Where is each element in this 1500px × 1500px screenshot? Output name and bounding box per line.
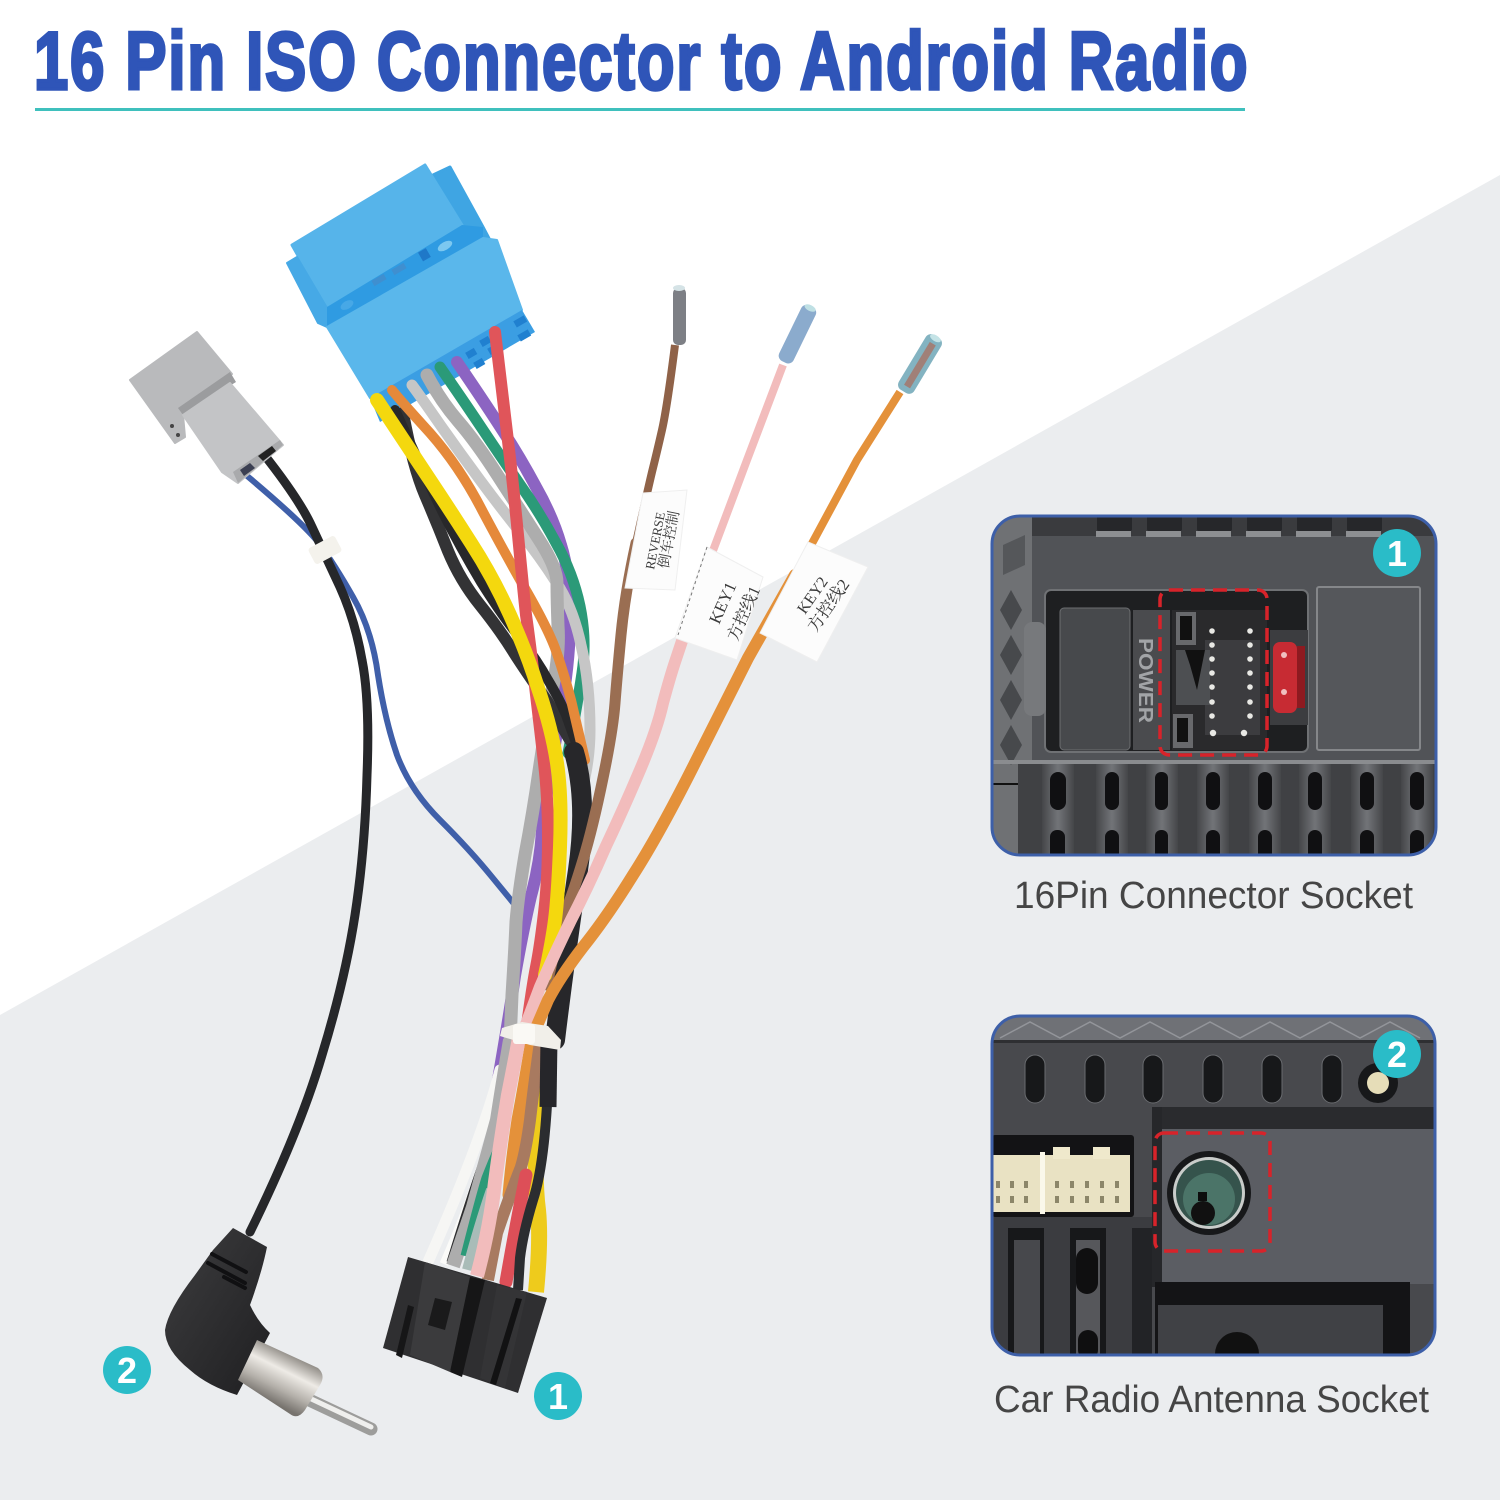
left hex pattern strip xyxy=(992,516,1032,855)
number badge 1: 1 xyxy=(1387,533,1407,574)
wire label: key1: 方控线1 xyxy=(723,583,764,644)
lower black xyxy=(518,1105,547,1290)
lower red xyxy=(506,1175,526,1282)
wire label: key2: KEY2 xyxy=(794,574,832,617)
lower recess xyxy=(1155,1282,1410,1354)
socket recess xyxy=(1045,590,1308,752)
plug metal barrel xyxy=(238,1340,323,1416)
wire: black trunk xyxy=(555,752,582,1040)
lower brown xyxy=(488,1042,540,1280)
white harness connector xyxy=(994,1135,1134,1217)
number badge 1 xyxy=(1373,529,1421,577)
small round socket xyxy=(1358,1063,1398,1103)
wire: orange key2 xyxy=(533,392,900,1035)
panel 2 frame xyxy=(992,1016,1435,1355)
antenna socket hole xyxy=(1167,1151,1251,1235)
wire label: reverse: 倒车控制 xyxy=(655,510,683,570)
caption: 16pin connector socket: 16Pin Connector Socket xyxy=(1014,875,1413,917)
antenna plug xyxy=(165,1228,371,1429)
sleeve tip: key2 wire xyxy=(896,331,945,396)
black sleeve xyxy=(548,1038,549,1107)
lower orange xyxy=(509,1040,532,1195)
lower grey xyxy=(453,1040,510,1266)
wire: purple xyxy=(457,362,570,1097)
wire: brown reverse xyxy=(547,345,675,985)
left blank block xyxy=(1060,608,1130,750)
wire label: reverse: REVERSE xyxy=(642,511,668,571)
lower yellow xyxy=(536,1045,544,1292)
title underline xyxy=(35,108,1245,111)
number badge 2: 2 xyxy=(1387,1034,1407,1075)
sleeve tip: reverse wire xyxy=(673,285,686,345)
antenna cable blue wire xyxy=(240,470,515,905)
lower wire bundle xyxy=(428,1038,549,1292)
wire: grey xyxy=(427,375,558,1043)
caption: car radio antenna socket: Car Radio Antenna Socket xyxy=(994,1379,1429,1421)
fuse xyxy=(1270,630,1308,725)
number badge 2: 2 xyxy=(117,1350,137,1391)
side bulge xyxy=(1032,622,1044,716)
number badge 1: 1 xyxy=(548,1376,568,1417)
wire: black 2 xyxy=(395,410,575,740)
zip tie: bundle xyxy=(500,1022,561,1050)
wire: pink key1 xyxy=(522,365,783,1035)
wire label: key1: KEY1 xyxy=(705,579,740,627)
wire: yellow xyxy=(377,400,561,975)
title: 16 Pin ISO Connector to Android Radio xyxy=(34,15,1248,107)
zip tie: antenna cable xyxy=(308,535,342,565)
wire: orange 1 xyxy=(392,390,585,760)
plug boot xyxy=(165,1228,270,1395)
wire: green xyxy=(440,367,584,753)
red dashed highlight xyxy=(1160,590,1267,755)
wire label: key1 xyxy=(675,547,764,660)
power label strip: POWER xyxy=(1134,638,1156,724)
right blank panel xyxy=(1317,587,1420,750)
number badge 2 xyxy=(103,1346,151,1394)
antenna cable black wire xyxy=(250,452,368,1232)
grey connector xyxy=(130,332,283,483)
panel: 16pin connector socket photo xyxy=(992,516,1436,860)
lower pale grey xyxy=(468,1190,492,1270)
top slots xyxy=(1025,1055,1342,1103)
plug strain relief grooves xyxy=(208,1254,246,1288)
antenna socket plate xyxy=(1152,1107,1435,1287)
plug pin xyxy=(305,1396,371,1429)
wire label: key2 xyxy=(760,542,868,662)
number badge 2 xyxy=(1373,1030,1421,1078)
lower vent band xyxy=(992,760,1436,860)
wire: light grey xyxy=(412,385,590,790)
number badge 1 xyxy=(534,1372,582,1420)
wire: black 1 xyxy=(403,413,570,740)
lower pink xyxy=(477,1038,519,1276)
lower green xyxy=(465,1140,502,1256)
panel 1 frame xyxy=(992,516,1436,855)
top vents xyxy=(1097,516,1382,531)
sleeve tip: key1 wire xyxy=(777,302,819,365)
lower left columns xyxy=(992,1217,1152,1360)
blue 16 pin connector xyxy=(287,165,535,422)
panel: car radio antenna socket photo xyxy=(992,1016,1435,1376)
wire label: key2: 方控线2 xyxy=(804,576,853,635)
red dashed highlight xyxy=(1155,1133,1270,1251)
power label strip xyxy=(1133,610,1170,750)
wire: red xyxy=(495,332,548,1040)
16 pin socket xyxy=(1172,610,1267,750)
black 16 pin plug xyxy=(383,1257,547,1393)
lower white strands xyxy=(428,1070,500,1262)
wire label: reverse xyxy=(625,490,687,590)
